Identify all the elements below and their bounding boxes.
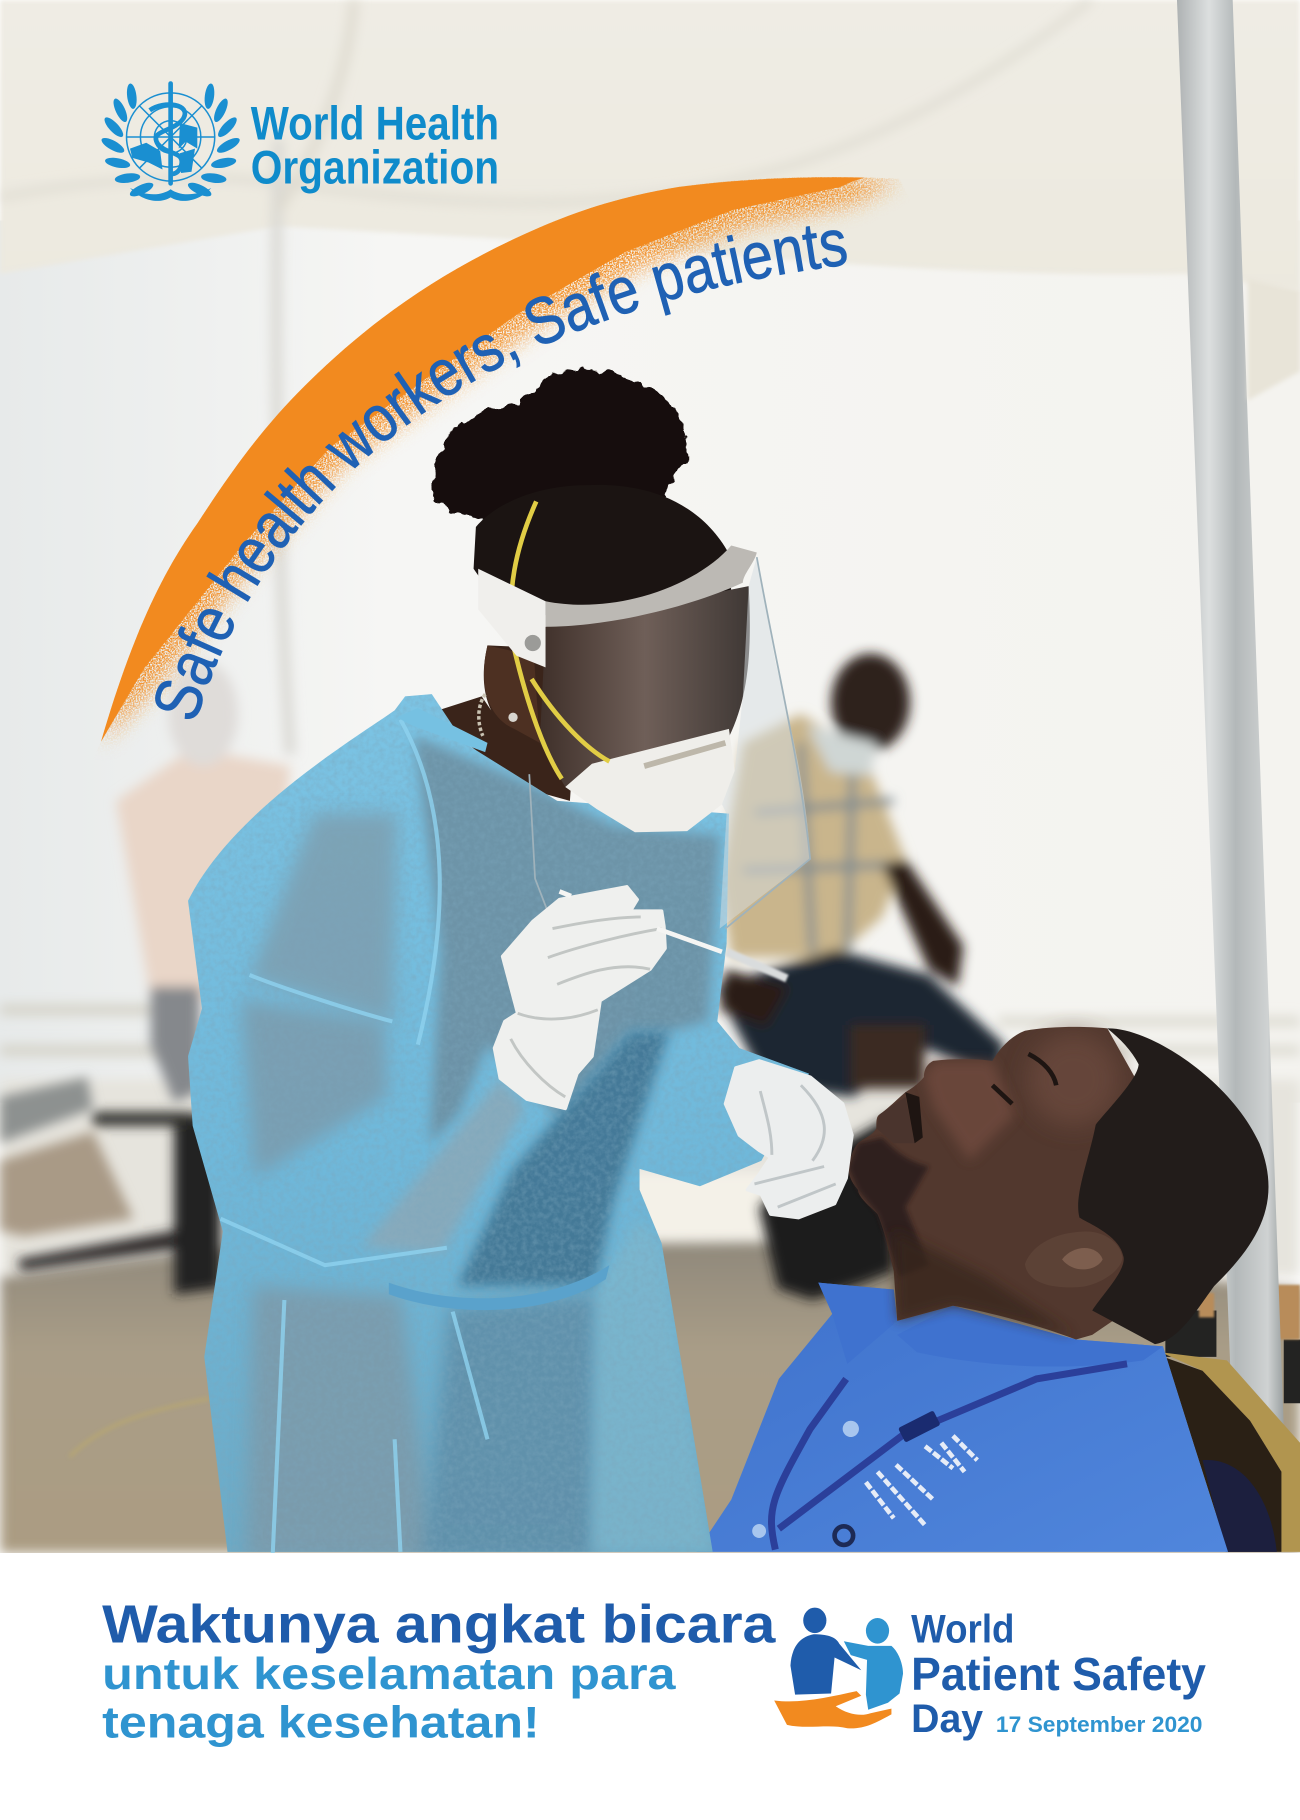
icon: two people and caring hand (774, 1608, 903, 1728)
metal tent pole (1177, 0, 1284, 1428)
patient ear (1025, 1231, 1122, 1287)
logo text: World: World (911, 1607, 1014, 1651)
respirator mask (565, 729, 735, 832)
patient neck shadow (894, 1230, 1074, 1335)
dark figure head (803, 1608, 826, 1633)
lips (876, 1098, 911, 1128)
test swab (559, 891, 722, 952)
gown collar (397, 708, 488, 752)
tent wall (0, 221, 1300, 1103)
yellow elastic straps (511, 501, 609, 779)
cardboard behind pole (1199, 1285, 1300, 1339)
swab tube blurred (727, 952, 787, 978)
neck (427, 645, 580, 801)
ground (0, 1242, 1300, 1553)
laurel left (99, 83, 155, 199)
tent ceiling (0, 0, 1300, 290)
WHO wordmark second line: Organization (251, 141, 499, 194)
necklace (479, 694, 485, 736)
ear (484, 645, 540, 743)
gown body (188, 694, 809, 1552)
yellow cable on ground (70, 1399, 209, 1457)
closed eye and brow (992, 1054, 1056, 1104)
shirt collar (818, 1283, 1163, 1367)
globe (127, 93, 215, 181)
gown fold lines (221, 720, 488, 1553)
gown mottled panels (240, 736, 720, 1561)
patient shirt (696, 1283, 1228, 1552)
shirt buttons (752, 1421, 859, 1538)
raised gloved hand (494, 887, 665, 1108)
health worker (188, 368, 852, 1561)
gown upper sleeve panel (250, 814, 397, 1021)
visor edge (529, 557, 810, 929)
gown forearm panel (362, 1078, 525, 1254)
tent flap right of pole (1248, 279, 1300, 400)
gown dark torso (457, 1031, 670, 1286)
light figure body (844, 1641, 903, 1710)
footer headline (102, 1595, 777, 1748)
logo text: Day: Day (911, 1697, 983, 1741)
WHO logo (99, 81, 499, 201)
patient (696, 1027, 1269, 1552)
gown skirt panel left (246, 1286, 435, 1561)
glove shading (511, 917, 662, 1097)
mask band (644, 743, 725, 766)
stool legs (759, 1114, 894, 1300)
lower gloved hand (725, 1061, 852, 1218)
patient nose highlight (924, 1061, 1016, 1161)
orange arc: solid core (101, 177, 865, 742)
headline line 1: Waktunya angkat bicara (102, 1595, 777, 1654)
face shield foam tab (478, 569, 546, 667)
patient beard shadow (848, 1138, 929, 1277)
transparent visor (720, 557, 810, 929)
pallet and bench (0, 1077, 221, 1294)
dark figure body (790, 1634, 861, 1695)
orange arc: soft sprayed inner edge (101, 177, 900, 742)
mustache (905, 1092, 923, 1143)
earring (508, 713, 518, 722)
curved slogan: Safe health workers, Safe patients (155, 226, 847, 719)
logo text: Patient Safety: Patient Safety (911, 1648, 1206, 1700)
ear highlight (1062, 1248, 1103, 1269)
face tinted behind shield (540, 586, 750, 787)
badge ring (835, 1526, 853, 1545)
patient neck and face (848, 1027, 1149, 1339)
logo text: date: 17 September 2020 (996, 1712, 1203, 1737)
headline line 2: untuk keselamatan para (102, 1650, 676, 1699)
hair bun (433, 368, 688, 519)
shield rivet (525, 635, 541, 651)
grating behind pole (1165, 1310, 1300, 1403)
bright gap on the ground (640, 1174, 764, 1238)
gown skirt right sheer panel (592, 1219, 713, 1552)
continents (130, 123, 197, 173)
lower wall and ground band (0, 1079, 1300, 1277)
gown texture (188, 694, 809, 1552)
embroidered logo on shirt (866, 1436, 977, 1525)
gown skirt panel centre (422, 1293, 597, 1561)
lanyard (771, 1364, 1127, 1550)
gown chest non-woven panel (414, 736, 720, 1143)
serpent (150, 105, 185, 174)
tent seams and shadows (0, 0, 1300, 1050)
background person left (116, 662, 290, 1103)
patient forehead highlight (1027, 1033, 1120, 1126)
staff (168, 81, 173, 186)
patient hair (1078, 1028, 1269, 1344)
head hair (474, 485, 731, 615)
World Patient Safety Day logo (774, 1607, 1206, 1741)
laurel right (186, 83, 242, 199)
patient chair (1161, 1352, 1300, 1552)
orange hand (774, 1691, 891, 1728)
background person right (715, 653, 1004, 1097)
lower glove shading (754, 1085, 836, 1207)
light figure head (866, 1618, 889, 1644)
WHO emblem (99, 81, 242, 201)
gown waist tie (389, 1265, 609, 1310)
lanyard clip (898, 1410, 941, 1443)
laurel ribbon (130, 188, 211, 201)
headline line 3: tenaga kesehatan! (102, 1699, 540, 1748)
WHO wordmark: World Health (251, 97, 499, 150)
gown elbow panel (240, 999, 388, 1178)
face shield band (546, 546, 757, 627)
